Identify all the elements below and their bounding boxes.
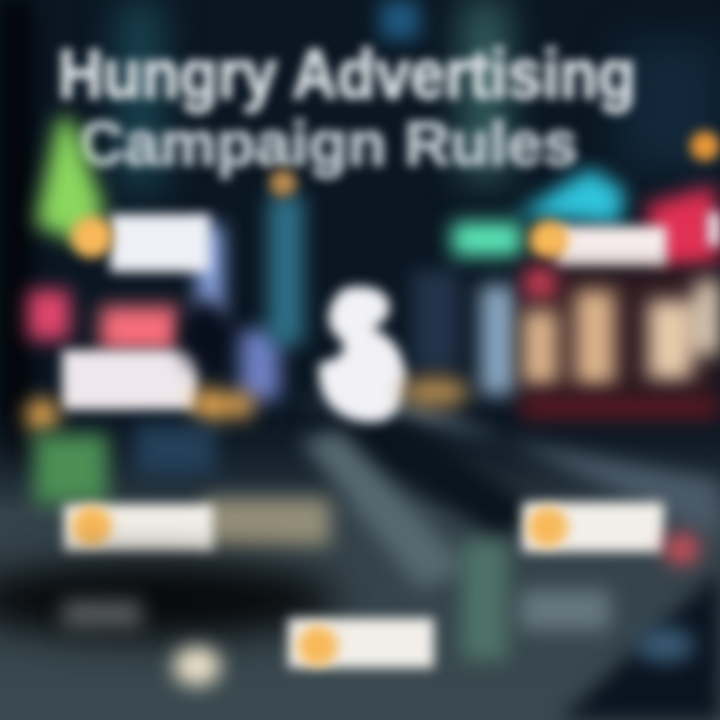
panel: left middle card	[25, 290, 280, 432]
dark figure	[180, 300, 230, 370]
base stripe	[520, 395, 720, 419]
pink header	[100, 306, 180, 352]
panel: left upper card	[35, 118, 223, 320]
center column	[268, 169, 304, 345]
beige extension	[205, 498, 330, 546]
red shape	[645, 185, 720, 272]
dark figure	[412, 270, 460, 370]
figures	[522, 280, 720, 385]
teal shape	[452, 222, 522, 256]
red block	[28, 290, 70, 340]
panel: right figures	[520, 268, 720, 419]
icon: orange circle	[529, 220, 569, 260]
white edge	[708, 212, 720, 246]
orange blob	[400, 376, 470, 408]
shadow	[0, 562, 340, 638]
white body	[555, 226, 667, 270]
blue edge	[197, 225, 223, 320]
icon: orange circle	[72, 506, 112, 546]
cyan shape	[515, 168, 625, 225]
panel: right upper banner	[452, 131, 720, 272]
panel: right lower card	[522, 502, 700, 565]
central figure	[319, 270, 516, 422]
card body	[64, 504, 214, 552]
title: Campaign Rules	[78, 110, 578, 179]
red stripe	[525, 268, 555, 298]
icon: orange dot	[269, 169, 297, 197]
card body	[62, 350, 198, 410]
blue bars	[135, 425, 215, 475]
icon: orange circle	[298, 626, 338, 666]
small label	[62, 600, 142, 628]
green block	[34, 434, 108, 504]
white shape	[319, 286, 407, 422]
icon: green shape	[35, 118, 105, 245]
title: Hungry Advertising	[58, 35, 636, 113]
blue figure	[480, 285, 516, 395]
panel: bottom center card	[288, 618, 434, 668]
panel: left lower card	[0, 498, 340, 638]
icon: orange corner circle	[690, 131, 720, 161]
orange dots	[25, 387, 254, 432]
icon: orange circle	[71, 216, 113, 258]
icon: orange circle	[528, 507, 568, 547]
white spot	[173, 646, 221, 686]
title	[58, 35, 636, 179]
red accent	[664, 533, 700, 565]
purple glow	[240, 330, 280, 400]
card body	[110, 214, 210, 272]
floor	[0, 400, 720, 720]
